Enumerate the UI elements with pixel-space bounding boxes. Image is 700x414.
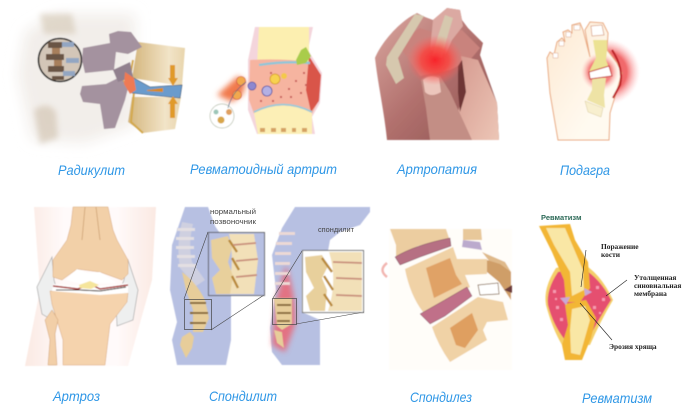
yellow edge xyxy=(120,60,143,133)
joint xyxy=(589,66,612,79)
compression arrows xyxy=(168,65,178,118)
caption: Спондилит: Спондилит xyxy=(209,388,277,404)
inflamed small box xyxy=(272,298,296,324)
normal zoom lines xyxy=(184,232,264,330)
upper disc xyxy=(395,238,451,265)
membrane lines xyxy=(259,62,310,65)
foot outline xyxy=(547,22,622,140)
normal label: нормальный xyxy=(210,208,256,216)
middle vertebra xyxy=(405,247,487,312)
vertebra body top xyxy=(132,42,185,86)
panel: spondylitis illustration xyxy=(170,207,370,365)
upper bone xyxy=(257,27,310,66)
inner palm xyxy=(402,28,480,76)
panel: arthrosis knee xyxy=(25,207,156,366)
dark triangle xyxy=(504,285,512,293)
femur xyxy=(53,207,128,280)
toe nails xyxy=(553,25,580,58)
skin layer xyxy=(545,262,613,345)
normal label xyxy=(210,208,257,226)
magnifier circle xyxy=(38,38,82,82)
caption: Артроз: Артроз xyxy=(52,388,100,404)
normal inset xyxy=(208,232,264,296)
right fingers and palm xyxy=(458,56,499,140)
caption: Спондилез: Спондилез xyxy=(410,389,472,405)
cytokine row xyxy=(260,128,307,132)
caption: Ревматизм: Ревматизм xyxy=(582,390,652,406)
pale background xyxy=(389,229,512,370)
caption: Радикулит: Радикулит xyxy=(58,162,125,178)
inner glow xyxy=(581,53,619,91)
right process xyxy=(487,260,511,300)
panel: gout foot xyxy=(547,22,640,140)
red edge xyxy=(612,50,621,98)
facet joint xyxy=(478,283,499,295)
big toe nail xyxy=(591,25,604,36)
upper finger xyxy=(430,8,463,54)
label: thickened synovial membrane: синовиальная xyxy=(634,281,681,290)
upper tan strip xyxy=(463,229,482,240)
inflamed zoom lines xyxy=(273,251,364,324)
lower bone xyxy=(562,300,596,360)
connecting arrow xyxy=(228,82,246,108)
panel: rheumatoid arthritis illustration xyxy=(210,27,322,134)
inflammatory cells xyxy=(210,73,287,128)
yellow cartilage xyxy=(79,281,99,289)
red inflammation xyxy=(272,265,295,352)
normal spine vertebrae xyxy=(176,222,209,358)
synovium xyxy=(249,59,320,116)
panel: spondylosis illustration xyxy=(382,229,512,370)
lower vertebra xyxy=(432,297,508,362)
caption: Артропатия: Артропатия xyxy=(396,161,477,177)
title: Ревматизм xyxy=(541,213,582,222)
joint diagram xyxy=(539,224,613,360)
faded leg background xyxy=(25,207,156,366)
upper spine shading xyxy=(40,14,76,34)
green patch xyxy=(296,47,311,65)
spondylitis label: спондилит xyxy=(318,227,355,234)
middle vertebra shading xyxy=(426,258,462,298)
inflammation halo xyxy=(574,39,640,105)
spondylitis body silhouette xyxy=(270,207,370,365)
thumb nail xyxy=(423,76,441,95)
upper right process xyxy=(482,252,511,272)
fibula xyxy=(45,310,58,365)
cartilage erosion xyxy=(560,288,592,305)
dots xyxy=(260,72,307,102)
pink arc arrow xyxy=(382,263,387,277)
lower vertebra shading xyxy=(450,313,478,348)
dark gap xyxy=(458,60,466,112)
lower disc xyxy=(420,287,472,324)
upper vertebra xyxy=(390,229,449,257)
toe bones xyxy=(589,40,609,72)
inflamed inset xyxy=(302,250,364,312)
cartilage top xyxy=(66,269,117,285)
capsule xyxy=(37,257,60,320)
metatarsal xyxy=(585,101,603,117)
panel: arthropathy hand xyxy=(375,8,499,140)
inflamed spine xyxy=(274,232,295,348)
upper facet xyxy=(462,240,482,250)
tibia xyxy=(50,291,128,365)
normal small box xyxy=(184,300,212,330)
sac mottling xyxy=(553,286,605,323)
normal label: позвоночник xyxy=(210,219,257,226)
bones xyxy=(386,14,424,84)
caption: Ревматоидный артрит: Ревматоидный артрит xyxy=(190,161,337,177)
hand silhouette xyxy=(375,8,499,140)
label: thickened synovial membrane xyxy=(634,273,681,298)
label: bone damage: кости xyxy=(601,250,621,259)
label: thickened synovial membrane: Утолщенная xyxy=(634,273,676,282)
lower spine shading xyxy=(34,105,58,144)
red inflammation xyxy=(407,35,463,85)
vertebra body bottom xyxy=(128,97,181,133)
caption: Подагра: Подагра xyxy=(560,162,610,178)
label: bone damage xyxy=(601,242,639,259)
normal body silhouette xyxy=(170,207,231,365)
purple processes xyxy=(82,31,142,73)
inflamed edge xyxy=(306,56,321,112)
capsule xyxy=(248,27,322,134)
label: cartilage erosion: Эрозия хряща xyxy=(609,342,657,351)
panel: radiculitis illustration xyxy=(18,14,185,144)
upper bone xyxy=(539,224,590,302)
label: thickened synovial membrane: мембрана xyxy=(634,289,667,298)
panel: rheumatism illustration xyxy=(539,213,681,360)
nerve inflammation xyxy=(124,72,136,94)
blue disc xyxy=(132,77,182,98)
thumb xyxy=(421,75,472,140)
lower bone xyxy=(254,106,312,134)
label: bone damage: Поражение xyxy=(601,242,639,251)
faded back background xyxy=(18,14,135,143)
joint space xyxy=(52,282,128,295)
synovial sac xyxy=(548,268,611,340)
leader lines xyxy=(580,250,627,340)
